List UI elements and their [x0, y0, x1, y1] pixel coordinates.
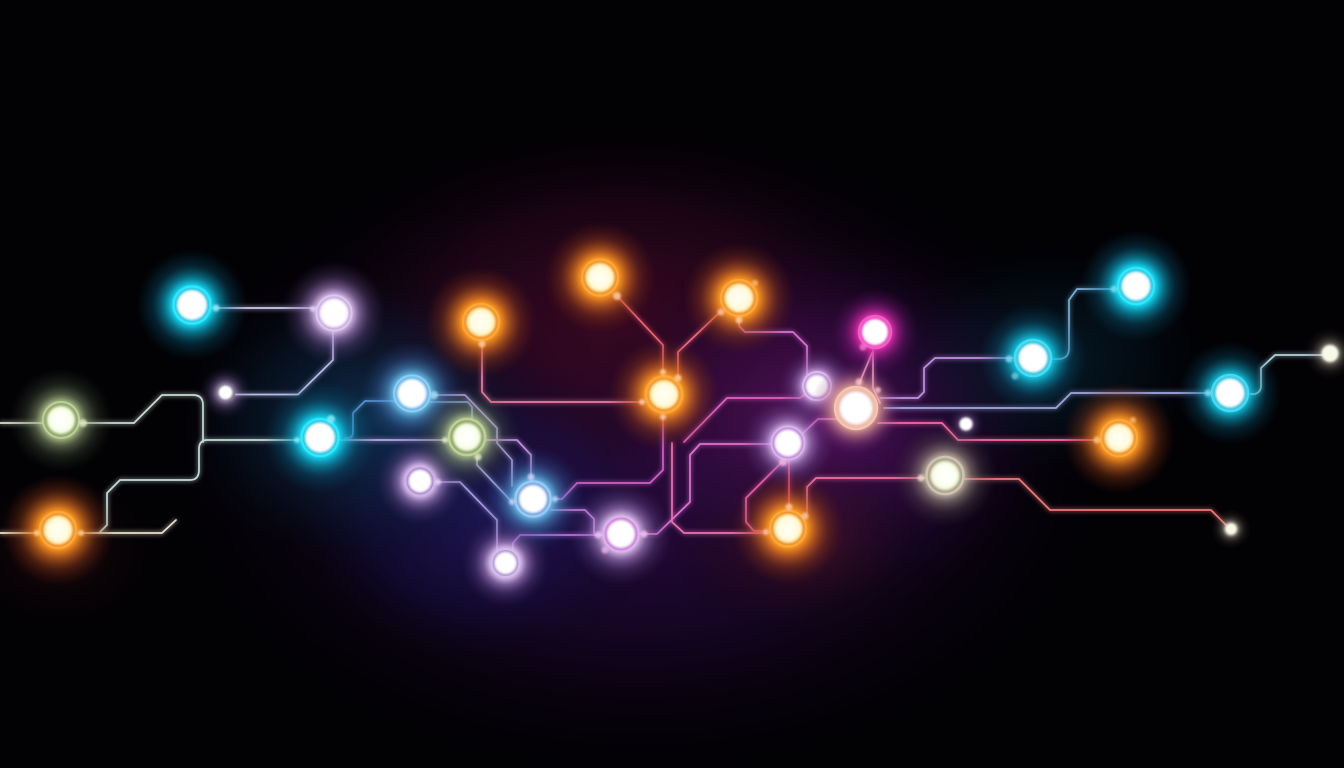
node: small white dot centre right [948, 406, 984, 442]
trace: diagonal to white node [684, 392, 808, 442]
node: cyan top right [1080, 230, 1192, 342]
node: lilac small left [376, 437, 464, 525]
node: cyan left centre [264, 382, 376, 494]
node: lilac centre right [742, 397, 834, 489]
node: pink [831, 288, 919, 376]
node: white bottom [462, 519, 550, 607]
node: small end dot lower right [1211, 509, 1251, 549]
node: peach large [810, 362, 902, 454]
trace: lilac to peach [802, 419, 838, 434]
trace: cyan to green bus [340, 439, 450, 441]
trace: right orange to white node [739, 318, 807, 374]
node: white lilac upper [779, 348, 855, 424]
trace: lilac to lower orange vertical [788, 461, 790, 510]
trace: top orange to central [618, 297, 663, 378]
node: blue lower [481, 447, 585, 551]
trace: lilac to small dot [236, 330, 333, 394]
trace: cyan bus to lower left [99, 440, 302, 533]
node: cyan mid right [979, 304, 1087, 412]
node: orange right [1063, 382, 1175, 494]
trace: lower orange to beige [807, 478, 925, 513]
ambient glow field [0, 130, 1220, 768]
node: lilac top left [282, 261, 386, 365]
node: purple lower [569, 482, 673, 586]
node: cyan top left [136, 249, 248, 361]
trace: beige to end dot [965, 479, 1226, 525]
node: sky blue [360, 342, 464, 446]
node: small end dot far right [1304, 328, 1344, 380]
trace: orange node left feed [0, 532, 40, 534]
trace: orange left to central [482, 340, 645, 402]
trace: orange node stub [77, 520, 176, 533]
node: orange upper left [425, 266, 537, 378]
trace: cyan right to end dot [1250, 355, 1322, 394]
node: cyan far right [1178, 341, 1282, 445]
trace: green node to junction [80, 395, 203, 442]
node: small white dot left [200, 366, 252, 418]
trace: blue to blue lower node [433, 395, 512, 486]
trace: peach to cyan mid [880, 358, 1014, 398]
trace: right orange to central [678, 312, 720, 376]
trace: lilac to lower orange loop [746, 462, 782, 531]
trace: white bottom to purple [513, 535, 606, 550]
trace: cyan to blue [345, 401, 394, 438]
trace: peach to orange right [878, 423, 1100, 440]
node: orange central [608, 338, 720, 450]
node: orange top [544, 222, 656, 334]
trace: lilac to white bottom node [436, 482, 497, 552]
trace: cyan to lilac [212, 307, 316, 309]
trace: pink to peach vertical [873, 350, 880, 403]
node: beige [893, 424, 997, 528]
trace: vertical to lower orange [672, 443, 766, 533]
trace: purple to lilac [640, 444, 771, 534]
node: green centre [415, 385, 519, 489]
trace: green to blue node [484, 440, 531, 482]
trace: blue to green [428, 402, 472, 422]
connector tabs [34, 280, 1212, 554]
trace: green node left feed [0, 422, 44, 424]
node: orange lower left [2, 474, 114, 586]
trace: blue to central orange [552, 412, 663, 499]
trace: peach to cyan right [884, 393, 1210, 408]
node: green left [9, 368, 113, 472]
node: orange lower centre [732, 472, 844, 584]
trace: pink to peach diagonal [859, 353, 872, 384]
trace: cyan mid to cyan top [1052, 289, 1118, 359]
trace: blue to purple [551, 510, 594, 535]
trace: green lower diagonal [477, 456, 512, 502]
circuit traces [0, 289, 1322, 552]
node: orange upper right [683, 242, 795, 354]
